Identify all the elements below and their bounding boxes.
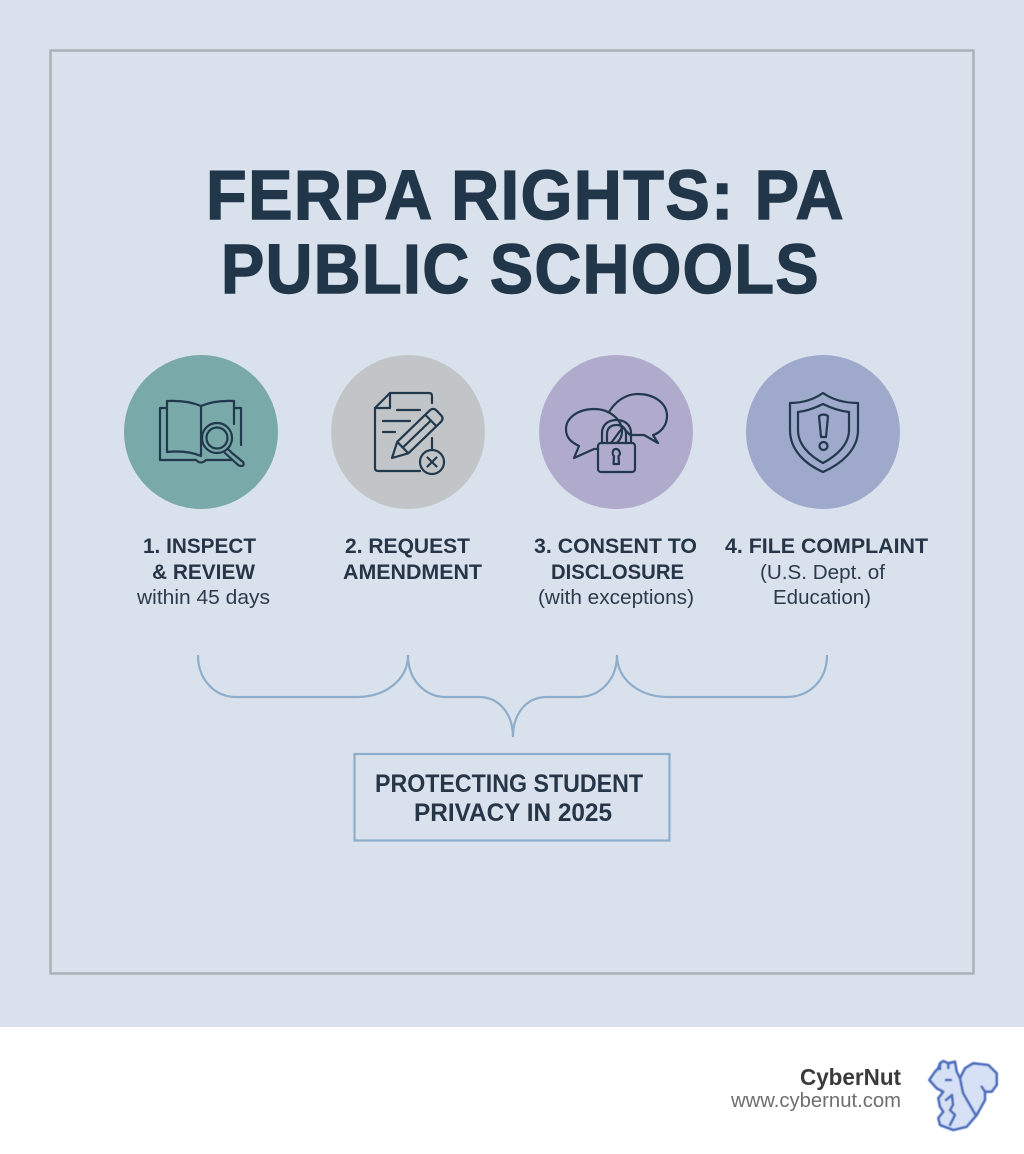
icon: shield with exclamation mark [746,355,900,509]
step 3 label [534,535,697,609]
icon: squirrel logo [929,1061,997,1130]
step 2 label [343,535,482,584]
icon: open book with magnifier [124,355,278,509]
step 3 label: (with exceptions) [538,587,694,609]
footer brand text: www.cybernut.com [730,1090,901,1112]
callout: protecting student privacy [354,754,670,840]
title: FERPA RIGHTS: PA [206,156,845,234]
title [206,156,845,308]
title: PUBLIC SCHOOLS [221,230,820,308]
step 4 label: (U.S. Dept. of [760,562,885,584]
step 1 label: & REVIEW [152,561,255,584]
step 4 label: 4. FILE COMPLAINT [725,535,928,558]
panel: step 1 inspect and review [124,355,278,609]
step 1 label [136,535,270,609]
icon: document with pencil [331,355,485,509]
step 3 label: 3. CONSENT TO [534,535,697,558]
step 4 label [725,535,928,609]
icon: speech bubbles with padlock [539,355,693,509]
panel: step 3 consent to disclosure [534,355,697,609]
step 4 label: Education) [773,587,871,609]
outer frame [50,50,974,974]
step 3 label: DISCLOSURE [551,561,684,584]
panel: step 2 request amendment [331,355,485,584]
footer brand text: CyberNut [800,1064,901,1090]
step 2 label: 2. REQUEST [345,535,470,558]
callout: protecting student privacy: PRIVACY IN 2025 [414,799,612,827]
footer brand text [730,1064,901,1112]
panel: step 4 file complaint [725,355,928,609]
curly bracket connector [198,655,827,737]
callout: protecting student privacy: PROTECTING STUDENT [375,770,643,798]
step 1 label: 1. INSPECT [143,535,256,558]
step 1 label: within 45 days [136,587,270,609]
step 2 label: AMENDMENT [343,561,482,584]
